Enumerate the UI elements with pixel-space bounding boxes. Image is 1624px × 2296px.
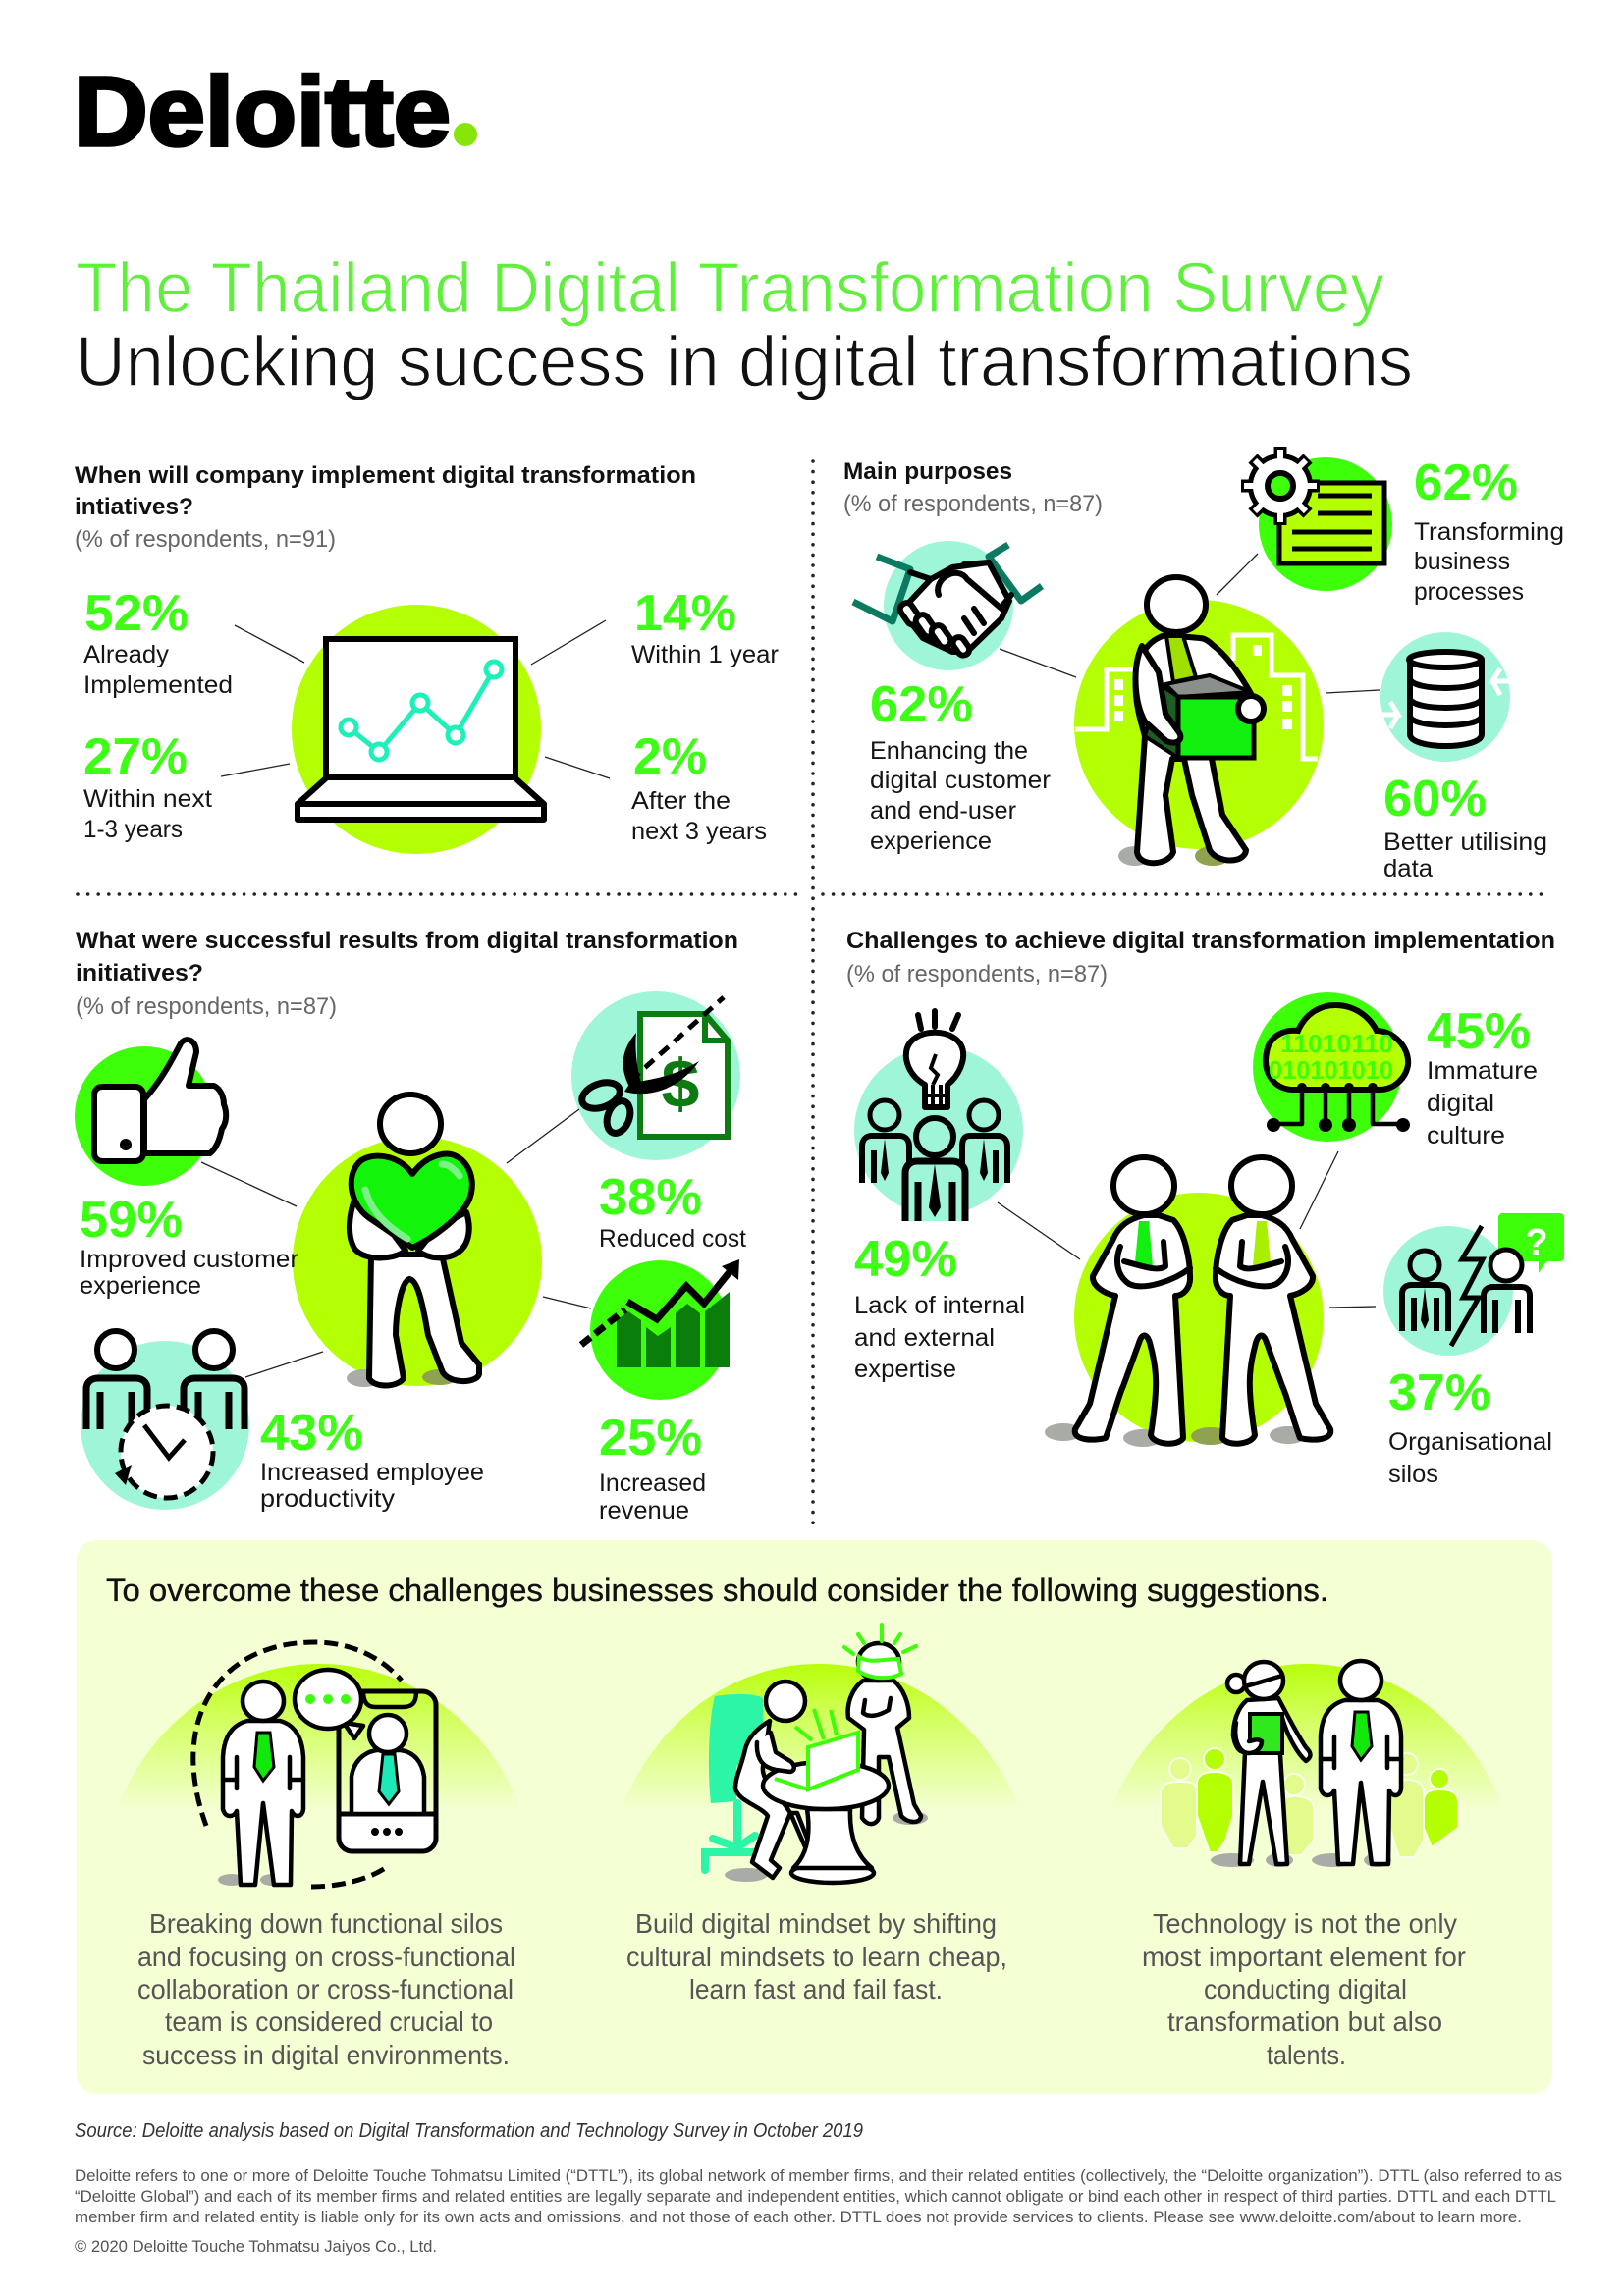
stat: 60% better utilising data (1383, 771, 1547, 882)
stat: 37% organisational silos: silos (1388, 1461, 1438, 1488)
stat: 2% after the next 3 years: After the (631, 787, 731, 815)
stat: 43% increased employee productivity (260, 1405, 484, 1513)
icon: gear and document (1217, 447, 1392, 595)
stat: 43% increased employee productivity: productivity (260, 1485, 396, 1513)
stat: 60% better utilising data: Better utilising (1383, 828, 1547, 856)
heading: implementation timing: (% of respondents, n=91) (75, 526, 336, 553)
icon: organisational silos: ? (1525, 1222, 1548, 1263)
stat: 62% transforming business processes: Transforming (1414, 518, 1564, 546)
heading: suggestions: To overcome these challenges businesses should consider the following suggestions. (106, 1573, 1328, 1608)
text: digital mindset: Build digital mindset by shifting (635, 1908, 997, 1939)
heading: implementation timing: When will company implement digital transformation (75, 462, 696, 489)
stat: 27% within next 1-3 years: Within next (83, 785, 212, 813)
stat: 25% increased revenue: revenue (599, 1497, 689, 1524)
legal disclaimer (75, 2167, 1562, 2256)
illustration: colleagues communicating via phone (114, 1642, 524, 1887)
legal disclaimer: © 2020 Deloitte Touche Tohmatsu Jaiyos Co., Ltd. (75, 2238, 437, 2256)
stat: 62% enhancing customer experience: experience (870, 828, 992, 855)
stat: 49% lack of expertise (854, 1231, 1025, 1383)
panel: successful results (75, 928, 746, 1524)
stat: 62% transforming business processes: business (1414, 548, 1510, 575)
stat: 27% within next 1-3 years: 27% (83, 728, 188, 785)
stat: 2% after the next 3 years: next 3 years (631, 818, 767, 845)
stat: 14% within 1 year: 14% (634, 585, 736, 642)
stat: 62% enhancing customer experience: 62% (870, 676, 973, 733)
stat: 62% transforming business processes (1414, 454, 1564, 606)
text: digital mindset (626, 1908, 1007, 2004)
illustration: people at table with laptop (618, 1625, 1023, 1883)
title: The Thailand Digital Transformation Survey (76, 249, 1384, 328)
stat: 25% increased revenue: Increased (599, 1469, 706, 1497)
text: breaking down silos: team is considered crucial to (165, 2006, 493, 2037)
stat: 45% immature digital culture: digital (1427, 1090, 1494, 1117)
icon: thumbs up (75, 1040, 297, 1206)
icon: database (1326, 632, 1510, 762)
stat: 25% increased revenue: 25% (599, 1410, 702, 1467)
text: digital mindset: learn fast and fail fast. (689, 1974, 943, 2004)
heading: implementation timing: intiatives? (75, 494, 193, 520)
stat: 52% already implemented (83, 585, 304, 699)
stat: 49% lack of expertise: expertise (854, 1356, 956, 1383)
text: digital mindset: cultural mindsets to learn cheap, (626, 1942, 1007, 1972)
heading: challenges: Challenges to achieve digital transformation implementation (846, 928, 1555, 954)
text: breaking down silos: success in digital environments. (142, 2040, 510, 2070)
stat: 38% reduced cost: 38% (599, 1169, 702, 1226)
heading: implementation timing (75, 462, 696, 553)
legal disclaimer: member firm and related entity is liable only for its own acts and omissions, and not those of each other. DTTL does not provide services to clients. Please see www.deloitte.com/about to learn more. (75, 2209, 1522, 2226)
text: talents: most important element for (1142, 1942, 1466, 1972)
text: talents: conducting digital (1204, 1974, 1407, 2004)
stat: 62% transforming business processes: processes (1414, 578, 1524, 606)
text: breaking down silos: and focusing on cross-functional (137, 1942, 515, 1972)
stat: 59% improved customer experience: Improved customer (80, 1246, 298, 1273)
heading: challenges (846, 928, 1555, 988)
icon: organisational silos (1329, 1213, 1564, 1356)
stat: 60% better utilising data: data (1383, 855, 1433, 882)
stat: 49% lack of expertise: and external (854, 1324, 995, 1352)
stat: 14% within 1 year: Within 1 year (631, 641, 779, 668)
icon: digital cloud: 11010110 (1280, 1029, 1393, 1058)
icon: revenue bars and arrow (543, 1259, 739, 1400)
stat: 62% enhancing customer experience: digital customer (870, 767, 1051, 794)
heading: challenges: (% of respondents, n=87) (846, 961, 1108, 988)
text: breaking down silos: collaboration or cross-functional (137, 1974, 514, 2004)
panel: when will company implement (75, 462, 779, 854)
title (76, 249, 1413, 401)
stat: 38% reduced cost (599, 1169, 746, 1253)
icon: handshake (853, 541, 1076, 677)
heading: successful results: (% of respondents, n=87) (76, 993, 337, 1020)
stat: 2% after the next 3 years (545, 728, 767, 845)
icon: scissors cutting dollar document: $ (662, 1045, 699, 1122)
text: talents: talents. (1267, 2040, 1346, 2070)
stat: 37% organisational silos: Organisational (1388, 1428, 1552, 1456)
stat: 25% increased revenue (599, 1410, 706, 1524)
panel: suggestions (77, 1540, 1552, 2094)
text: breaking down silos: Breaking down functional silos (149, 1908, 503, 1939)
legal disclaimer: Deloitte refers to one or more of Deloitte Touche Tohmatsu Limited (“DTTL”), its global network of member firms, and their related entities (collectively, the “Deloitte organization”). DTTL (also referred to as (75, 2167, 1562, 2185)
stat: 62% transforming business processes: 62% (1414, 454, 1518, 511)
legal disclaimer: “Deloitte Global”) and each of its member firms and related entities are legally separate and independent entities, which cannot obligate or bind each other in respect of third parties. DTTL and each DTTL (75, 2188, 1556, 2206)
icon: scissors cutting dollar document (507, 991, 740, 1163)
heading: main purposes: Main purposes (843, 458, 1012, 485)
illustration: laptop with line chart (292, 605, 544, 854)
stat: 45% immature digital culture: 45% (1427, 1003, 1531, 1060)
stat: 60% better utilising data: 60% (1383, 771, 1487, 828)
text: talents (1142, 1908, 1466, 2070)
stat: 43% increased employee productivity: 43% (260, 1405, 363, 1462)
stat: 2% after the next 3 years: 2% (633, 728, 707, 785)
heading: successful results: What were successful results from digital transformation (76, 928, 738, 954)
illustration: person carrying box (1074, 577, 1324, 866)
illustration: person holding heart (293, 1095, 542, 1387)
stat: 59% improved customer experience: experience (80, 1272, 201, 1300)
panel: challenges (846, 928, 1564, 1488)
stat: 45% immature digital culture: Immature (1427, 1057, 1538, 1085)
stat: 37% organisational silos: 37% (1388, 1364, 1490, 1421)
panel: main purposes (843, 447, 1564, 882)
heading: main purposes: (% of respondents, n=87) (843, 491, 1103, 517)
stat: 59% improved customer experience: 59% (80, 1192, 183, 1249)
icon: employees and clock (81, 1331, 323, 1510)
stat: 52% already implemented: Implemented (83, 671, 233, 699)
stat: 62% enhancing customer experience: and end-user (870, 797, 1016, 825)
stat: 52% already implemented: 52% (84, 585, 189, 642)
heading: successful results: initiatives? (76, 960, 203, 987)
stat: 38% reduced cost: Reduced cost (599, 1225, 746, 1253)
stat: 52% already implemented: Already (83, 641, 170, 668)
stat: 49% lack of expertise: 49% (854, 1231, 957, 1288)
stat: 27% within next 1-3 years: 1-3 years (83, 816, 183, 843)
stat: 49% lack of expertise: Lack of internal (854, 1292, 1025, 1319)
logo: Deloitte: Deloitte (74, 57, 451, 167)
text: talents: Technology is not the only (1153, 1908, 1457, 1939)
stat: 45% immature digital culture: culture (1427, 1122, 1505, 1149)
text: breaking down silos (137, 1908, 515, 2070)
icon: digital cloud: 010101010 (1269, 1055, 1393, 1085)
stat: 37% organisational silos (1388, 1364, 1552, 1488)
illustration: talents and crowd (1107, 1661, 1507, 1867)
icon: digital cloud (1253, 992, 1410, 1229)
stat: 59% improved customer experience (80, 1192, 298, 1300)
heading: main purposes (843, 458, 1103, 517)
stat: 27% within next 1-3 years (83, 728, 290, 843)
stat: 43% increased employee productivity: Increased employee (260, 1459, 484, 1486)
stat: 45% immature digital culture (1427, 1003, 1538, 1149)
stat: 14% within 1 year (531, 585, 779, 668)
icon: lightbulb and team (854, 1011, 1080, 1259)
illustration: two people with crossed arms (1045, 1157, 1330, 1447)
heading: successful results (76, 928, 738, 1020)
text: talents: transformation but also (1167, 2006, 1442, 2037)
stat: 62% enhancing customer experience (870, 676, 1051, 855)
source note: Source: Deloitte analysis based on Digital Transformation and Technology Survey in October 2019 (75, 2120, 863, 2142)
title: Unlocking success in digital transformations (76, 323, 1413, 401)
stat: 62% enhancing customer experience: Enhancing the (870, 737, 1028, 765)
